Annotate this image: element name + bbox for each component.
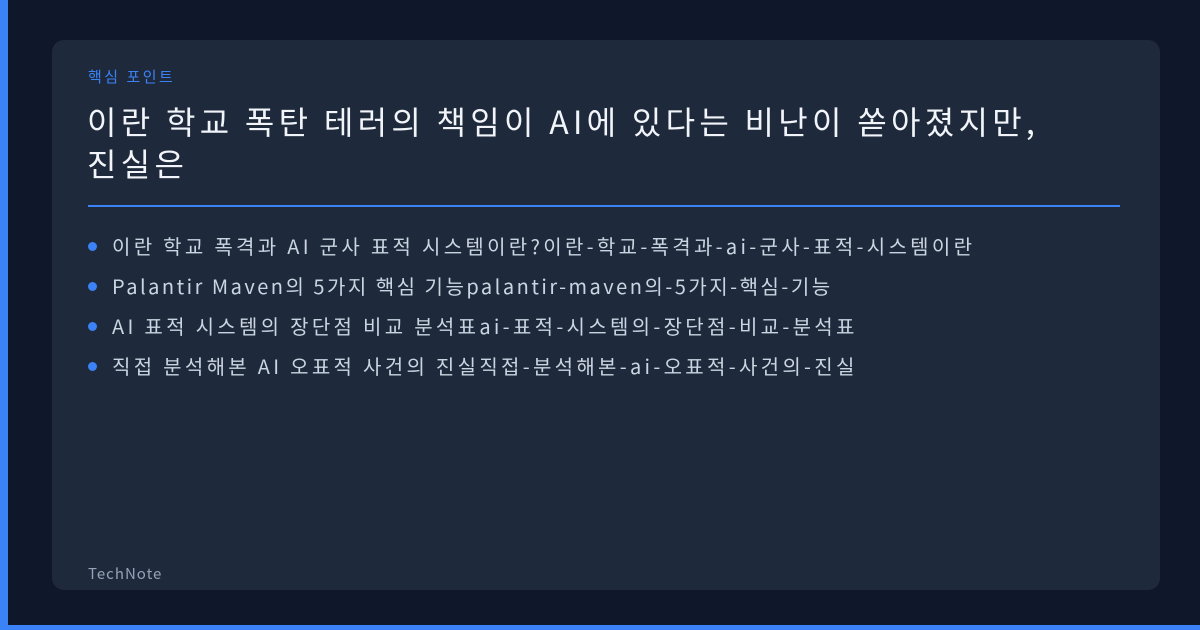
title: 진실은 — [87, 140, 188, 186]
label: key point: 핵심 포인트 — [88, 66, 175, 87]
bullet 3: AI 표적 시스템의 장단점 비교 분석표ai-표적-시스템의-장단점-비교-분석표 — [112, 311, 858, 340]
bullet list — [88, 231, 975, 380]
footer: brand: TechNote — [88, 563, 162, 584]
title: 이란 학교 폭탄 테러의 책임이 AI에 있다는 비난이 쏟아졌지만, — [87, 98, 1039, 144]
bullet 4: 직접 분석해본 AI 오표적 사건의 진실직접-분석해본-ai-오표적-사건의-진실 — [112, 351, 858, 380]
bullet 2: Palantir Maven의 5가지 핵심 기능palantir-maven의-5가지-핵심-기능 — [112, 271, 833, 300]
title — [87, 98, 1039, 186]
bullet 1: 이란 학교 폭격과 AI 군사 표적 시스템이란?이란-학교-폭격과-ai-군사-표적-시스템이란 — [112, 231, 975, 260]
